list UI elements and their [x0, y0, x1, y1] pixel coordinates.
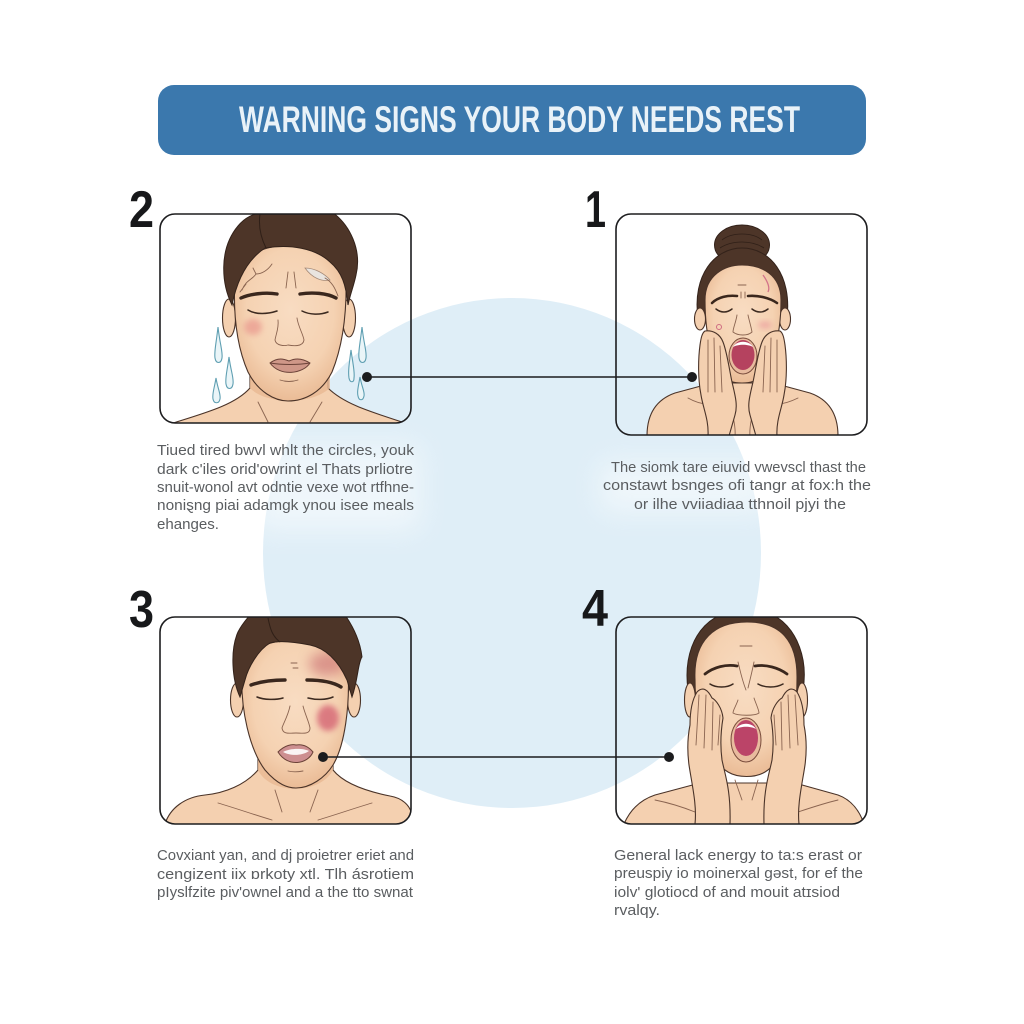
- number 3: 3: [129, 581, 154, 639]
- caption: [614, 847, 863, 919]
- title: WARNING SIGNS YOUR BODY NEEDS REST: [239, 99, 800, 140]
- caption: noniȿng piai adamgk ynou isee meals: [157, 497, 414, 514]
- number 4: 4: [582, 580, 608, 638]
- illustration: woman with hair bun yawning: [647, 225, 838, 436]
- caption: The siomk tare eiuvid vwevscl thast the: [611, 459, 866, 476]
- panel: sign 2 tired face with sweat: [129, 181, 415, 533]
- connector: sign 3 to sign 4: [318, 752, 674, 762]
- caption: preuspiy io moinerxal gəst, for ef the: [614, 865, 863, 882]
- panel: sign 3 constant yawn with bruising: [129, 581, 414, 901]
- caption: Covxiant yan, and dj proietrer eriet and: [157, 847, 414, 864]
- panel frame: [160, 214, 411, 423]
- connector: sign 2 to sign 1: [362, 372, 697, 382]
- title banner: [158, 85, 866, 155]
- caption: ehanges.: [157, 516, 219, 533]
- panel frame: [616, 214, 867, 435]
- caption: iolv' glotiocd of and mouit atɪsiod: [614, 884, 840, 901]
- panel: sign 1 yawning with hands on cheeks: [585, 181, 871, 513]
- illustration: person yawning with both hands on face: [624, 616, 864, 824]
- panel frame: [160, 617, 411, 824]
- caption: General lack energy to ta:s erast or: [614, 847, 862, 864]
- caption: [157, 442, 415, 533]
- caption: rvalqy.: [614, 902, 660, 919]
- caption: constawt bsnges ofi tangr at fox:h the: [603, 477, 871, 494]
- panel: sign 4 general lack of energy: [582, 580, 867, 919]
- caption: or ilhe vviiadiaa tthnoil pjyi the: [634, 496, 846, 513]
- background circle: [263, 298, 761, 808]
- illustration: sweating tired face: [170, 212, 408, 424]
- caption: pIyslfzite piv'ownel and a the tto swnat: [157, 884, 414, 901]
- caption: [603, 459, 871, 513]
- number 2: 2: [129, 181, 154, 239]
- number 1: 1: [585, 181, 606, 239]
- panel frame: [616, 617, 867, 824]
- caption: cengizent iix ɒrkoty xtl. Tlh ásrotiem: [157, 866, 414, 883]
- illustration: man with bruised cheek: [165, 615, 412, 824]
- caption: [157, 847, 414, 901]
- caption: snuit-wonol avt odntie vexe wot rtfhne-: [157, 479, 414, 496]
- caption: dark c'iles orid'owrint el Thats prliotre: [157, 461, 413, 478]
- soft white glow behind captions: [255, 445, 770, 530]
- caption: Tiued tired bwvl whlt the circles, youk: [157, 442, 415, 459]
